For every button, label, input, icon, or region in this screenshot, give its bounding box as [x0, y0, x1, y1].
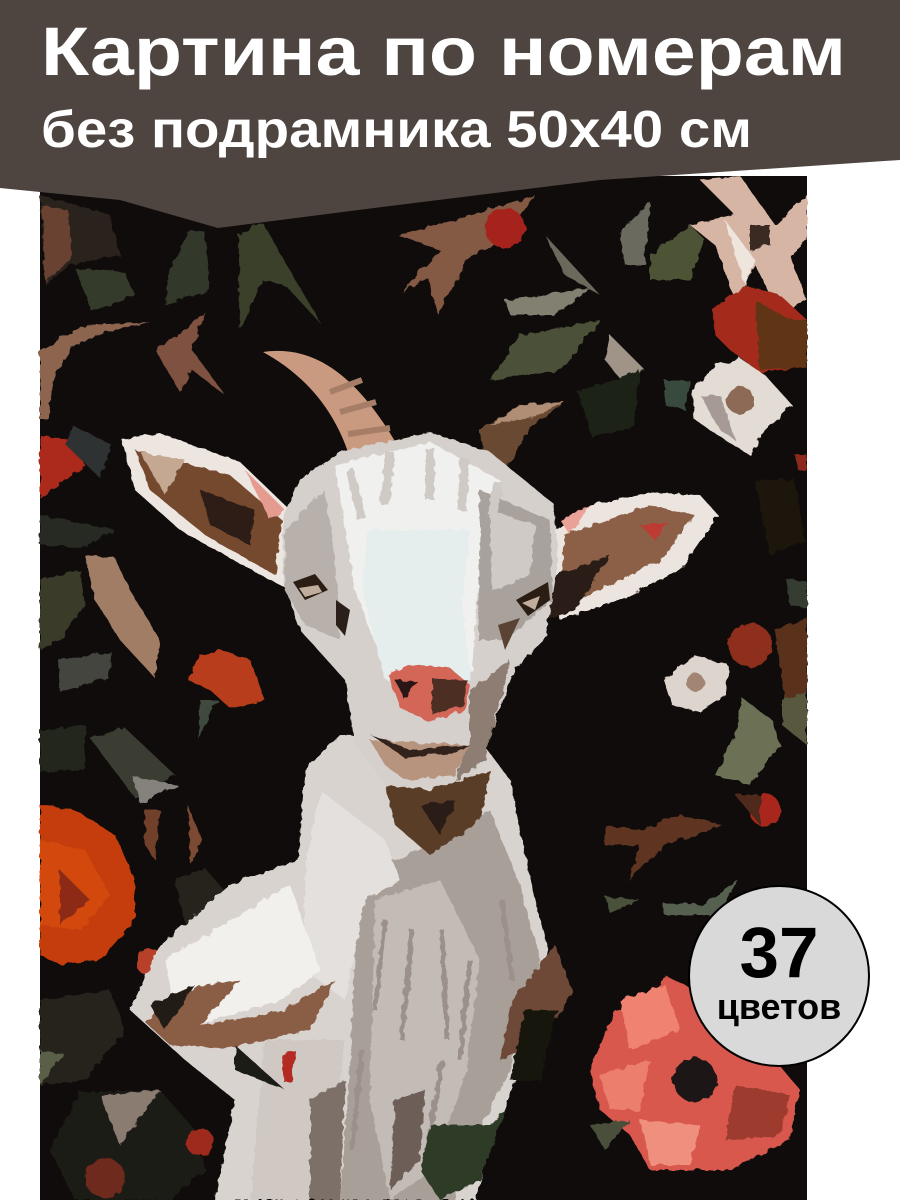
goat: right ear [545, 493, 718, 620]
goat: right horn [480, 402, 565, 470]
goat: body [130, 735, 548, 1200]
flower: pink peony [590, 975, 800, 1170]
foliage: upper right [398, 176, 807, 608]
badge label: цветов [717, 986, 841, 1027]
title: Картина по номерам [41, 13, 846, 90]
painting [40, 176, 807, 1200]
flower: top right [690, 176, 807, 315]
goat: neck shadow [385, 770, 490, 855]
badge: 37 colours [689, 886, 869, 1066]
banner [0, 0, 900, 228]
flower: large orange dahlia [40, 805, 135, 965]
flower: white small [664, 655, 728, 712]
goat: left ear [122, 433, 290, 590]
goat: left horn [263, 351, 400, 458]
goat: head [283, 432, 558, 790]
flower: white daisy [692, 358, 792, 455]
subtitle: без подрамника 50x40 см [41, 101, 752, 159]
foliage: upper left [40, 195, 322, 803]
foliage over the goat [145, 945, 572, 1200]
foliage: lower right [605, 618, 807, 915]
badge number: 37 [740, 914, 818, 993]
flower: red centre-left [188, 650, 265, 740]
flower: red and brown [712, 285, 807, 372]
goat: eyes [293, 574, 550, 650]
foliage: lower left [40, 805, 245, 1200]
goat: nose and mouth [370, 664, 470, 758]
